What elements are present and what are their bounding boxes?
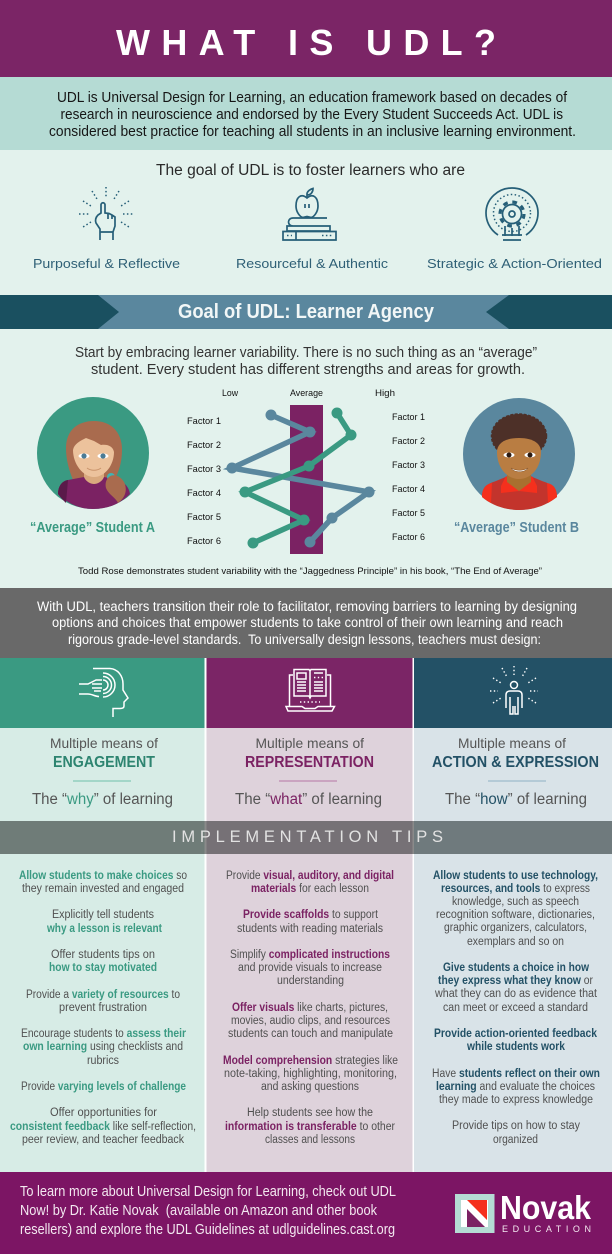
tips: engagement: why a lesson is relevant [46, 923, 162, 935]
footer text: resellers) and explore the UDL Guidelines at udlguidelines.cast.org [20, 1222, 395, 1238]
label: resourceful: Resourceful & Authentic [236, 256, 389, 271]
tips: representation: information is transferable to other [225, 1121, 395, 1133]
tips: engagement: consistent feedback like self-reflection, [10, 1121, 196, 1133]
left factor labels: Factor 4 [187, 488, 221, 499]
column: engagement summary: Multiple means of [50, 735, 158, 751]
right factor labels: Factor 1 [392, 412, 425, 423]
icon: book on laptop [286, 670, 334, 711]
axis labels: Low [222, 388, 238, 399]
tips: representation: Offer visuals like charts, pictures, [232, 1002, 388, 1014]
tips: engagement: Offer students tips on [51, 949, 155, 961]
tips: action and expression: they express what they know or [438, 975, 593, 987]
left factor labels [187, 416, 221, 547]
icon: pointing hand [79, 187, 133, 240]
right factor labels: Factor 5 [392, 508, 425, 519]
right factor labels [392, 412, 425, 543]
tips: engagement: peer review, and teacher feedback [22, 1134, 184, 1146]
tips: engagement: Offer opportunities for [50, 1107, 157, 1119]
axis labels [222, 388, 395, 399]
tips: representation: Provide visual, auditory, and digital [226, 870, 394, 882]
tips: representation: understanding [277, 975, 344, 987]
tips: engagement: Allow students to make choices so [19, 870, 187, 882]
intro text [49, 90, 576, 140]
facilitator copy: options and choices that empower students to take control of their own learning and reach [52, 615, 563, 630]
tips: action and expression: can meet or exceed a standard [443, 1002, 588, 1014]
tips: representation: movies, audio clips, and resources [231, 1015, 390, 1027]
banner: learner agency [0, 295, 612, 329]
tips: representation: classes and lessons [265, 1134, 355, 1146]
tips: representation: materials for each lesson [251, 883, 369, 895]
axis labels: Average [290, 388, 323, 399]
left factor labels: Factor 1 [187, 416, 221, 427]
column: representation summary: Multiple means of [256, 735, 364, 751]
logo: Novak Education: EDUCATION [502, 1224, 591, 1234]
intro text: research in neuroscience and endorsed by the Every Student Succeeds Act. UDL is [60, 107, 563, 123]
tips: action and expression: Provide action-oriented feedback [434, 1028, 598, 1040]
logo: Novak Education: Novak [500, 1189, 592, 1226]
column: engagement summary [32, 735, 173, 808]
left factor labels: Factor 3 [187, 464, 221, 475]
tips: action and expression: learning and evaluate the choices [436, 1081, 595, 1093]
tips: engagement: Provide varying levels of challenge [21, 1081, 186, 1093]
column: representation summary [235, 735, 382, 808]
footer text: Now! by Dr. Katie Novak (available on Amazon and other book [20, 1203, 378, 1219]
column: engagement summary: ENGAGEMENT [53, 754, 155, 771]
column: action and expression summary: ACTION & EXPRESSION [432, 754, 599, 771]
tips: action and expression: resources, and tools to express [441, 883, 590, 895]
tips: action and expression: while students work [466, 1041, 566, 1053]
tips: engagement: how to stay motivated [49, 962, 157, 974]
panel: facilitator text [0, 588, 612, 658]
column: action and expression summary: Multiple means of [458, 735, 566, 751]
right factor labels: Factor 3 [392, 460, 425, 471]
tips: action and expression [432, 870, 600, 1146]
column: representation summary: The “what” of learning [235, 791, 382, 808]
panel: action header [414, 658, 612, 728]
banner heading: Goal of UDL: Learner Agency [178, 301, 435, 323]
tips: action and expression: Give students a choice in how [443, 962, 589, 974]
tips: action and expression: exemplars and so on [467, 936, 564, 948]
label: student A: “Average” Student A [30, 519, 155, 536]
panel: engagement header [0, 658, 204, 728]
tips: engagement: own learning using checklists and [23, 1041, 183, 1053]
tips: action and expression: Provide tips on how to stay [452, 1120, 580, 1132]
tips: representation: Provide scaffolds to support [243, 909, 379, 921]
tips: representation: Help students see how the [247, 1107, 373, 1119]
left factor labels: Factor 2 [187, 440, 221, 451]
footer text [20, 1184, 396, 1238]
right factor labels: Factor 4 [392, 484, 425, 495]
column: engagement summary: The “why” of learning [32, 791, 173, 808]
column: action and expression summary: The “how” of learning [445, 791, 587, 808]
tips: representation: and provide visuals to increase [238, 962, 382, 974]
tips: engagement: rubrics [87, 1055, 119, 1067]
tips: representation: Simplify complicated instructions [230, 949, 390, 961]
panel: learner goals [33, 162, 602, 271]
icon: apple on books [283, 188, 336, 240]
variability text: student. Every student has different strengths and areas for growth. [91, 362, 525, 378]
banner: implementation tips [0, 821, 612, 854]
label: purposeful: Purposeful & Reflective [33, 256, 180, 271]
label: strategic: Strategic & Action-Oriented [427, 256, 602, 271]
tips: engagement [10, 870, 196, 1146]
source note: Todd Rose demonstrates student variability with the “Jaggedness Principle” in his book, “The End of Average” [78, 566, 542, 577]
tips: engagement: they remain invested and engaged [22, 883, 184, 895]
tips: action and expression: graphic organizers, calculators, [444, 922, 587, 934]
tips: representation: note-taking, highlighting, monitoring, [224, 1068, 397, 1080]
panel: representation header [206, 658, 412, 728]
icon: gear bulb [486, 188, 538, 240]
left factor labels: Factor 6 [187, 536, 221, 547]
tips: action and expression: recognition software, dictionaries, [436, 909, 595, 921]
intro text: UDL is Universal Design for Learning, an education framework based on decades of [57, 90, 568, 106]
tips: engagement: prevent frustration [59, 1002, 147, 1014]
left factor labels: Factor 5 [187, 512, 221, 523]
facilitator copy: rigorous grade-level standards. To universally design lessons, teachers must design: [68, 632, 541, 647]
avatar: student B [463, 398, 575, 510]
tips: engagement: Provide a variety of resources to [26, 989, 180, 1001]
footer text: To learn more about Universal Design for Learning, check out UDL [20, 1184, 396, 1200]
facilitator copy: With UDL, teachers transition their role to facilitator, removing barriers to learning by designing [37, 599, 577, 614]
intro text: considered best practice for teaching all students in an inclusive learning environment. [49, 124, 576, 140]
chart: jaggedness factors [187, 388, 425, 554]
average band [290, 405, 323, 554]
header panel [0, 0, 612, 77]
facilitator copy [37, 599, 577, 647]
icon: person with rays [490, 666, 538, 714]
tips: representation: students with reading materials [237, 923, 383, 935]
column: action and expression summary [432, 735, 599, 808]
axis labels: High [375, 388, 395, 399]
tips: engagement: Encourage students to assess their [21, 1028, 186, 1040]
tips: representation: and asking questions [261, 1081, 359, 1093]
title: WHAT IS UDL? [116, 22, 496, 63]
tips: action and expression: they made to express knowledge [439, 1094, 593, 1106]
column: representation summary: REPRESENTATION [245, 754, 374, 771]
tips: action and expression: organized [493, 1134, 538, 1146]
footer panel [0, 1172, 612, 1254]
tips: action and expression: what they can do as evidence that [434, 988, 598, 1000]
tips: representation: students can touch and manipulate [228, 1028, 393, 1040]
variability text: Start by embracing learner variability. There is no such thing as an “average” [75, 345, 537, 361]
tips: action and expression: knowledge, such as speech [452, 896, 579, 908]
label: student B: “Average” Student B [454, 519, 579, 536]
tips: engagement: Explicitly tell students [52, 909, 154, 921]
line: student B profile [226, 410, 374, 548]
intro panel [0, 77, 612, 150]
tips: representation [223, 870, 398, 1146]
logo: Novak Education [455, 1189, 592, 1234]
right factor labels: Factor 2 [392, 436, 425, 447]
goal heading: The goal of UDL is to foster learners who are [156, 162, 465, 179]
column backgrounds [0, 658, 612, 1172]
line: student A profile [240, 408, 356, 548]
icon: head and hand [79, 668, 128, 717]
tips heading: IMPLEMENTATION TIPS [172, 828, 443, 846]
right factor labels: Factor 6 [392, 532, 425, 543]
variability text [75, 345, 537, 378]
tips: action and expression: Have students reflect on their own [432, 1068, 600, 1080]
tips: representation: Model comprehension strategies like [223, 1055, 398, 1067]
avatar: student A [37, 397, 149, 509]
